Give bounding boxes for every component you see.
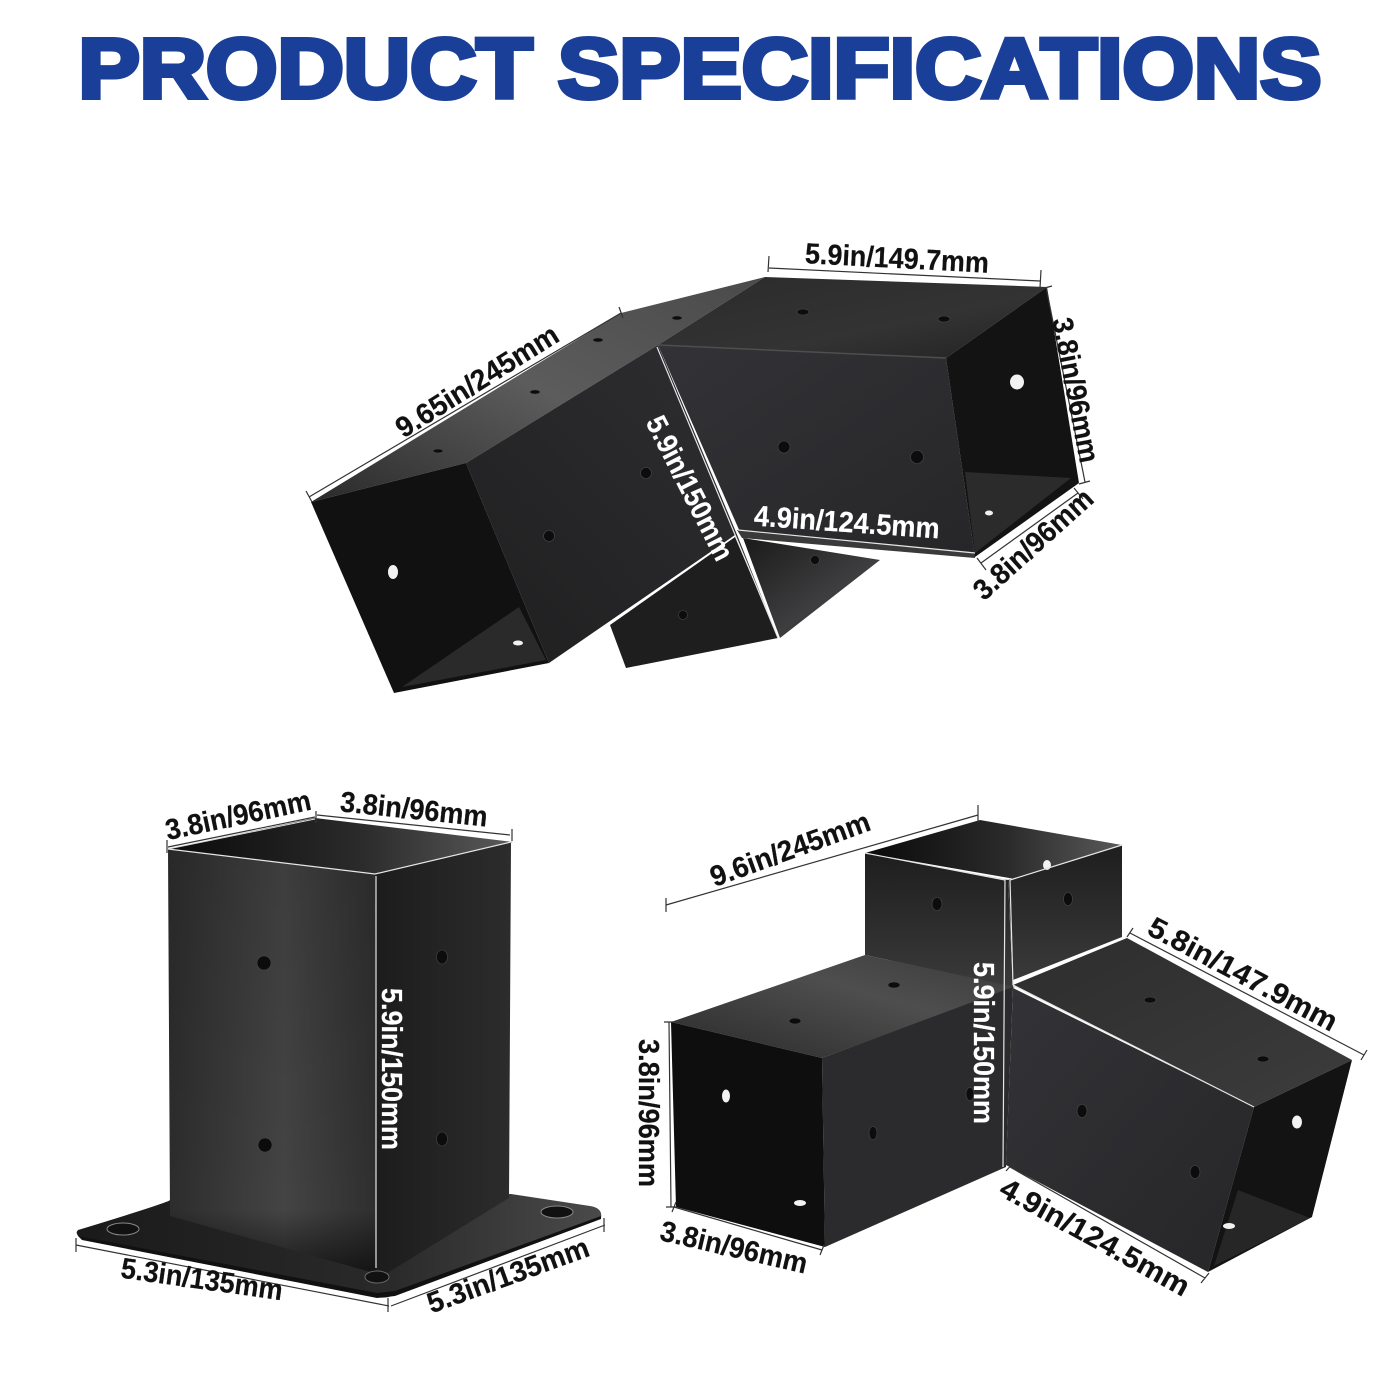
dimension label: 5.9in/149.7mm bbox=[804, 238, 990, 280]
post base bracket diagram with dimensions bbox=[76, 785, 605, 1320]
dimension label: 5.8in/147.9mm bbox=[1142, 911, 1343, 1038]
dimension lines bbox=[306, 256, 1090, 638]
dimension label: 4.9in/124.5mm bbox=[753, 501, 941, 545]
bracket body: post base bbox=[77, 818, 601, 1298]
dimension label: 5.9in/150mm bbox=[375, 988, 407, 1150]
holes bbox=[107, 950, 573, 1283]
angled bracket diagram with dimensions bbox=[306, 238, 1105, 693]
dimension label: 3.8in/96mm bbox=[632, 1039, 664, 1187]
dimension label: 3.8in/96mm bbox=[162, 785, 314, 847]
dimension label: 5.9in/150mm bbox=[639, 411, 739, 566]
holes bbox=[388, 309, 1024, 646]
holes bbox=[722, 860, 1302, 1229]
title: PRODUCT SPECIFICATIONS bbox=[78, 22, 1322, 116]
dimension lines bbox=[76, 811, 605, 1312]
dimension label: 5.3in/135mm bbox=[423, 1232, 594, 1320]
dimension label: 3.8in/96mm bbox=[339, 786, 489, 834]
three-way bracket diagram with dimensions bbox=[632, 805, 1367, 1303]
dimension lines bbox=[664, 805, 1367, 1283]
dimension label: 5.9in/150mm bbox=[967, 962, 999, 1124]
dimension label: 3.8in/96mm bbox=[1045, 315, 1105, 465]
dimension label: 4.9in/124.5mm bbox=[994, 1172, 1195, 1303]
dimension label: 3.8in/96mm bbox=[967, 483, 1100, 607]
bracket body: three-way bbox=[671, 820, 1352, 1272]
dimension label: 5.3in/135mm bbox=[119, 1253, 285, 1307]
bracket body: angled two-way bbox=[311, 277, 1079, 693]
dimension label: 9.6in/245mm bbox=[706, 806, 875, 894]
dimension label: 9.65in/245mm bbox=[390, 319, 565, 445]
dimension label: 3.8in/96mm bbox=[657, 1216, 810, 1280]
